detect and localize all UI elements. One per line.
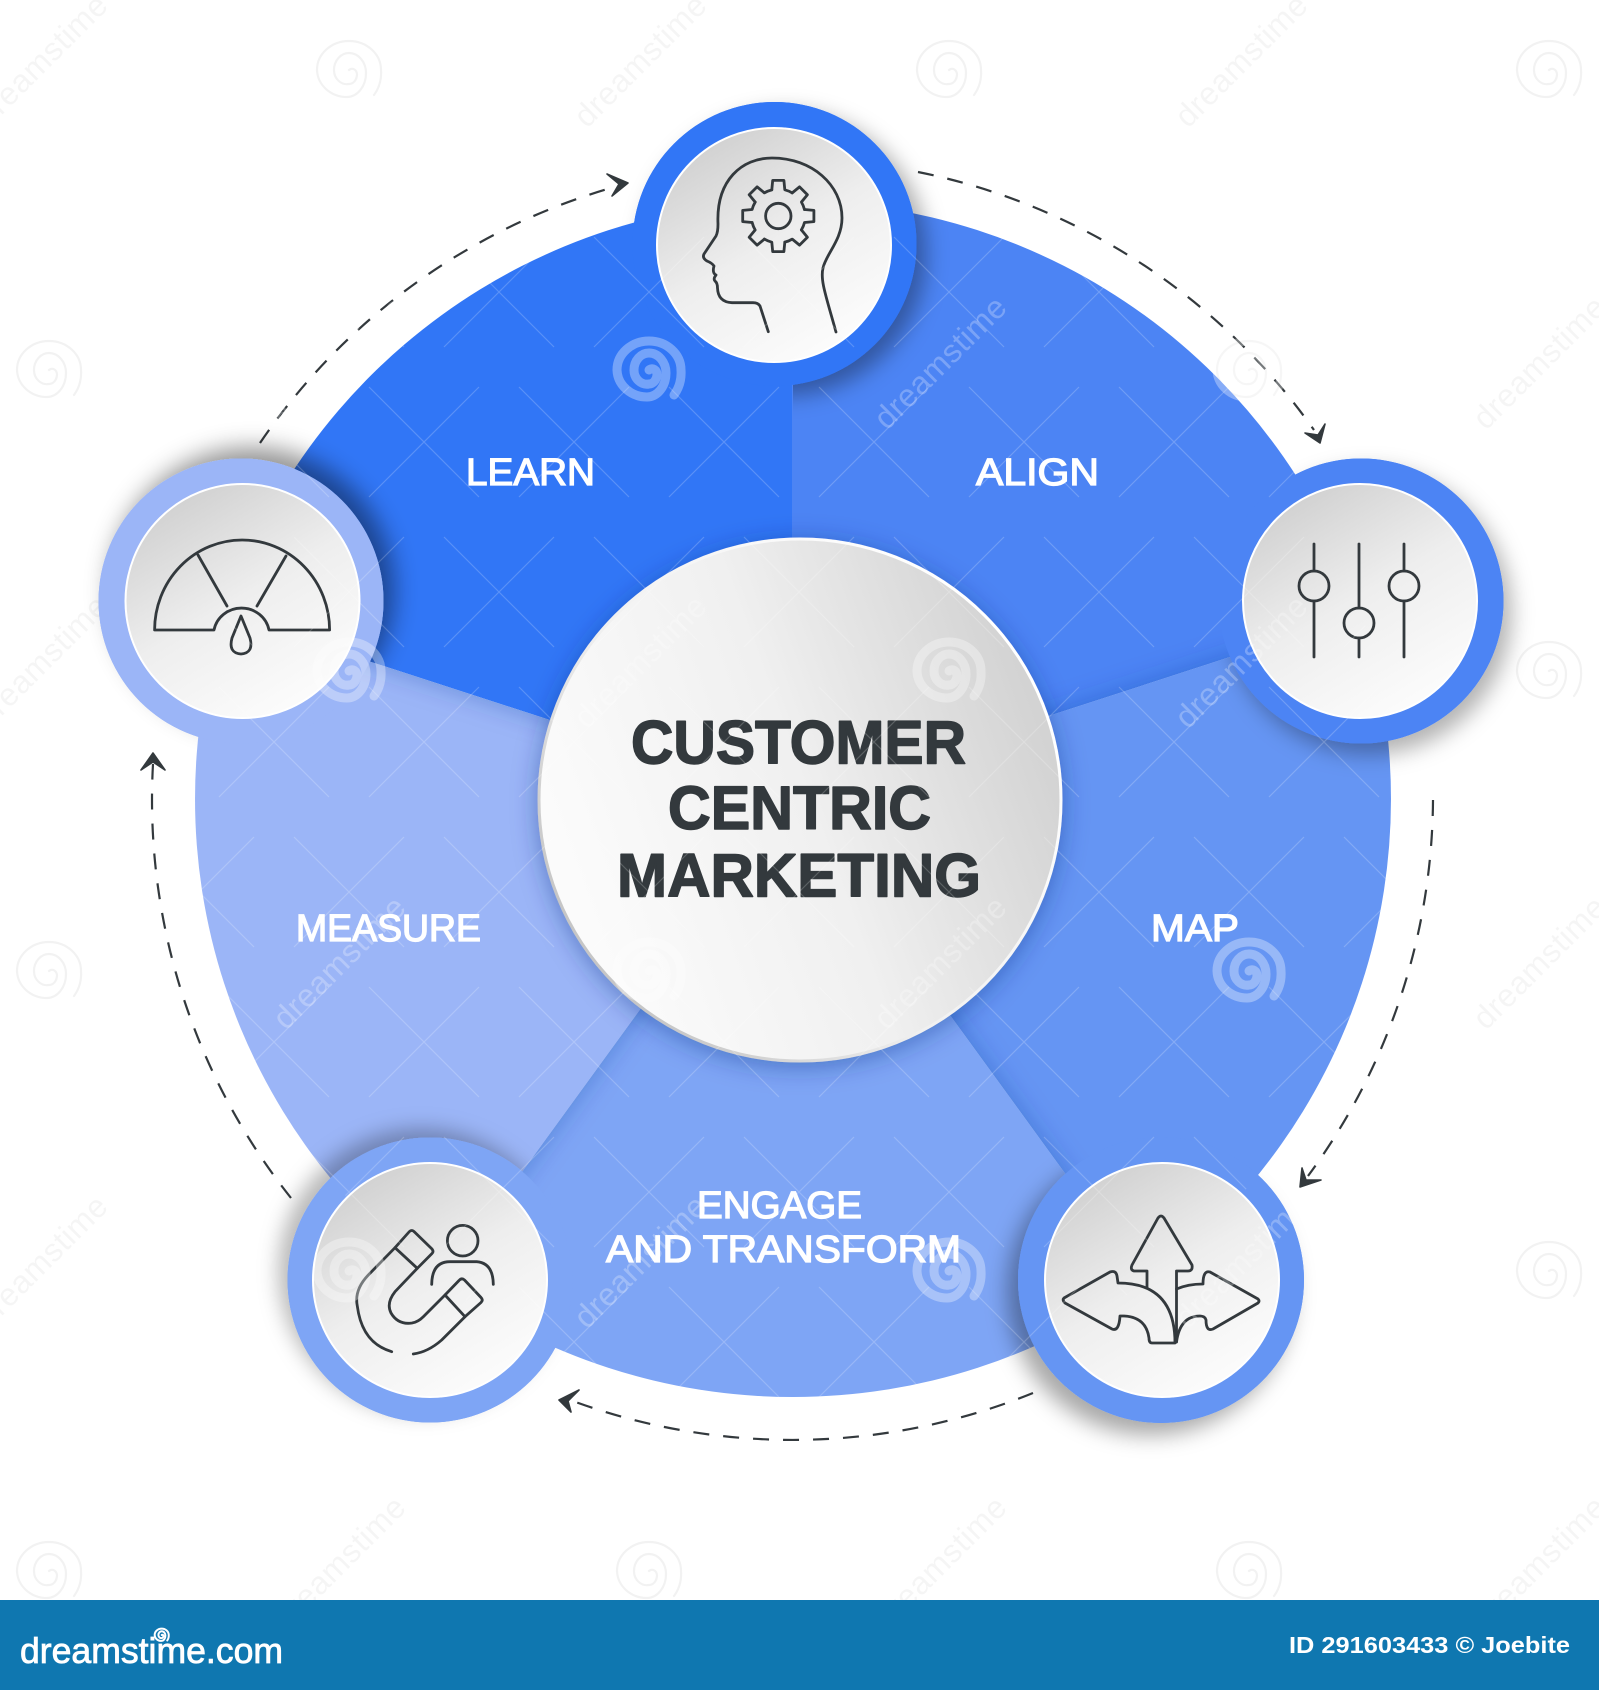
watermark on white background: dreamstime	[265, 1489, 413, 1636]
segment: learn	[224, 201, 793, 799]
arrow: map to engage	[559, 1390, 1033, 1440]
watermark over artwork	[195, 201, 1391, 1397]
watermark over artwork: dreamstime	[265, 289, 413, 436]
footer logo text: dreamstime.com	[20, 1630, 283, 1671]
watermark over artwork: dreamstime	[1167, 588, 1315, 735]
label: measure: MEASURE	[296, 908, 481, 950]
title: CUSTOMER	[631, 708, 966, 776]
arrow: engage to measure	[141, 753, 291, 1198]
unit: map segment with ring	[950, 657, 1391, 1448]
watermark over artwork: dreamstime	[265, 889, 413, 1036]
icon: diverging arrows	[1063, 1216, 1259, 1343]
label: learn: LEARN	[466, 452, 595, 494]
footer logo spiral	[155, 1629, 169, 1641]
footer image id: ID 291603433 © Joebite	[1289, 1632, 1570, 1658]
label: engage and transform: AND TRANSFORM	[606, 1229, 961, 1271]
unit: engage segment with ring	[268, 1008, 1066, 1425]
watermark over artwork: dreamstime	[866, 289, 1014, 436]
unit: measure segment with ring	[98, 201, 793, 1283]
arrow: align to map	[1300, 800, 1433, 1187]
watermark over artwork: dreamstime	[866, 889, 1014, 1036]
label: engage and transform	[606, 1185, 961, 1271]
label: align: ALIGN	[976, 452, 1099, 494]
title: CENTRIC	[668, 774, 931, 842]
segment labels	[296, 452, 1239, 1271]
icon disc: sliders	[1243, 484, 1477, 718]
watermark over artwork: dreamstime	[566, 1188, 714, 1335]
watermark over artwork: dreamstime	[566, 588, 714, 735]
ring: learn	[632, 102, 916, 386]
arrow: learn to align	[918, 172, 1325, 443]
title	[617, 708, 981, 910]
icon disc: diverging arrows	[1045, 1163, 1279, 1397]
unit: align segment with ring	[792, 213, 1524, 767]
icon: magnet with person	[357, 1225, 493, 1354]
watermark on white background: dreamstime	[866, 1489, 1014, 1636]
title: MARKETING	[617, 842, 981, 910]
center circle with title	[539, 539, 1061, 1061]
footer band	[0, 1600, 1599, 1690]
watermark over artwork: dreamstime	[1167, 1188, 1315, 1335]
dashed cycle arrows	[141, 172, 1433, 1440]
icon: head with gear	[703, 158, 842, 332]
label: engage and transform: ENGAGE	[697, 1185, 862, 1227]
label: map: MAP	[1151, 908, 1239, 950]
icon disc: magnet attracting person	[313, 1163, 547, 1397]
icon disc: head with gear	[657, 128, 891, 362]
icon: gauge	[155, 540, 330, 654]
icon: sliders	[1299, 544, 1419, 657]
arrow: measure to learn	[260, 174, 628, 443]
icon disc: gauge	[126, 484, 360, 718]
